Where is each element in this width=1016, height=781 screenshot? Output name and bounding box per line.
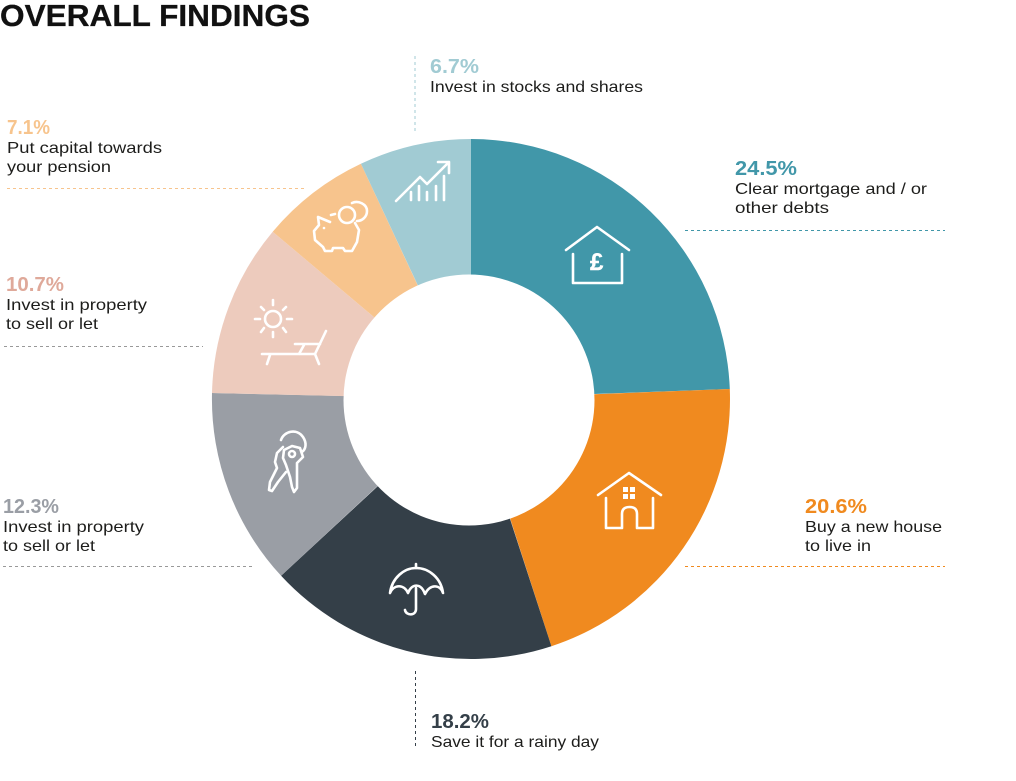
donut hole <box>344 274 594 526</box>
label: 20.6% new house: to live in <box>805 538 871 555</box>
label: 6.7% stocks <box>415 56 643 131</box>
label: 10.7% property: to sell or let <box>6 316 99 333</box>
label: 7.1% pension: your pension <box>7 159 111 176</box>
label: 18.2% rainy day: Save it for a rainy day <box>431 734 599 751</box>
icon: rising chart <box>396 162 449 201</box>
label: 18.2% rainy day <box>416 671 599 751</box>
icon: sun and lounger <box>255 300 326 364</box>
label: 12.3% property: 12.3% <box>3 496 59 518</box>
label: 7.1% pension: Put capital towards <box>7 140 162 157</box>
segment: property 12.3% <box>212 393 471 576</box>
icon: piggy bank <box>314 202 367 251</box>
icon: house with pound sign <box>566 227 629 283</box>
label: 24.5% mortgage: other debts <box>735 200 829 217</box>
label: 10.7% property: Invest in property <box>6 297 147 314</box>
icon: house with door <box>598 473 661 528</box>
label: 12.3% property <box>3 496 253 566</box>
icon: umbrella <box>390 564 443 614</box>
label: 24.5% mortgage: 24.5% <box>735 158 797 180</box>
label: 24.5% mortgage <box>685 158 945 230</box>
label: 12.3% property: Invest in property <box>3 519 144 536</box>
donut chart <box>212 139 730 659</box>
label: 18.2% rainy day: 18.2% <box>431 711 489 733</box>
label: 7.1% pension: 7.1% <box>7 117 50 139</box>
label: 20.6% new house <box>685 496 945 566</box>
segment: rainy day 18.2% <box>281 399 551 659</box>
segment: clear mortgage 24.5% <box>471 139 730 399</box>
label: 7.1% pension <box>7 117 304 188</box>
segment: property 10.7% <box>212 232 471 399</box>
label: 20.6% new house: 20.6% <box>805 496 867 518</box>
label: 6.7% stocks: 6.7% <box>430 56 479 78</box>
segment: stocks 6.7% <box>361 139 471 399</box>
label: 20.6% new house: Buy a new house <box>805 519 942 536</box>
label: 6.7% stocks: Invest in stocks and shares <box>430 79 643 96</box>
label: 24.5% mortgage: Clear mortgage and / or <box>735 181 928 198</box>
segment: new house 20.6% <box>471 389 730 646</box>
label: 12.3% property: to sell or let <box>3 538 96 555</box>
segment: pension 7.1% <box>273 164 471 399</box>
icon: keys <box>269 432 306 492</box>
icon: house with pound sign: £ <box>590 249 604 276</box>
label: 10.7% property <box>4 274 203 346</box>
label: 10.7% property: 10.7% <box>6 274 64 296</box>
